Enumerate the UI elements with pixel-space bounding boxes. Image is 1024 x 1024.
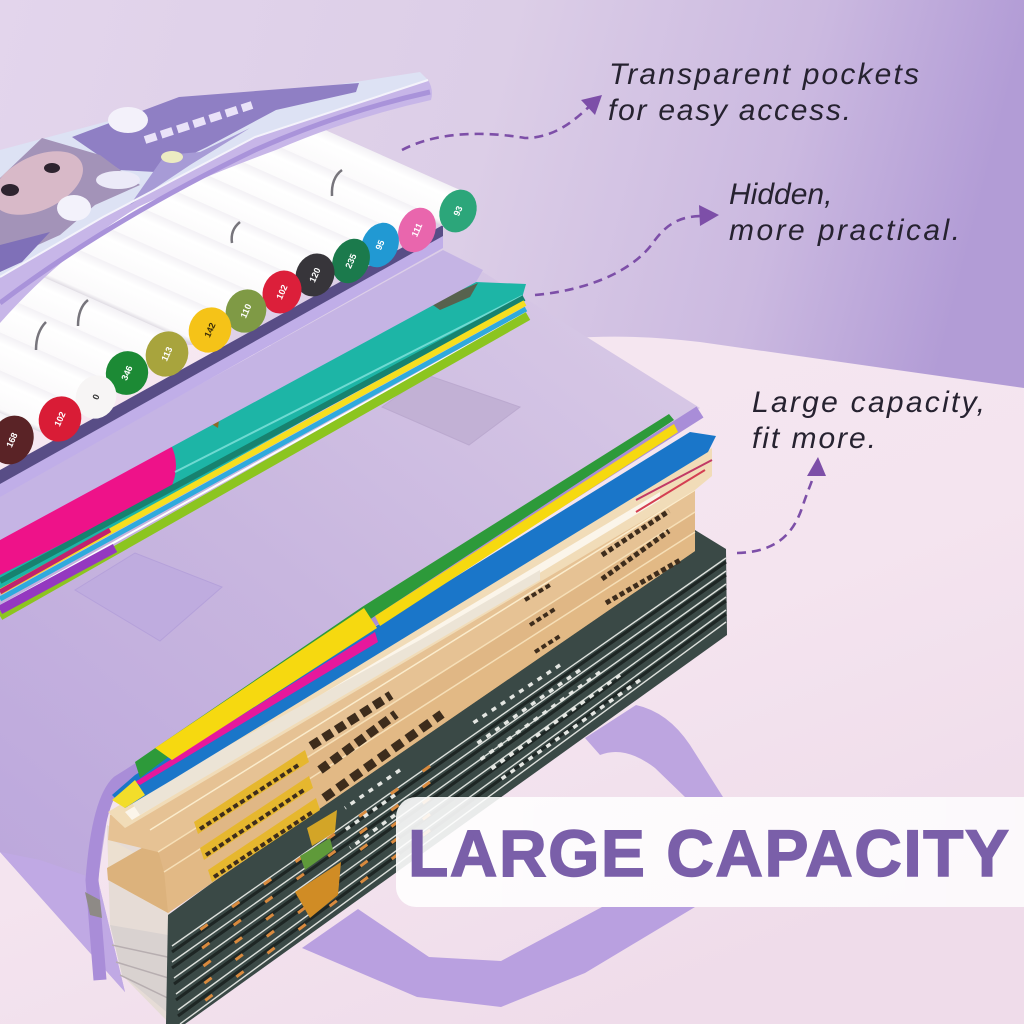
marker tray (0, 225, 443, 495)
face (0, 138, 93, 228)
spine titles (200, 511, 682, 877)
arrow (535, 205, 719, 295)
marker: blue: 95 (373, 238, 387, 252)
marker: green: 346 (119, 364, 135, 382)
marker: red 2 (0, 317, 89, 449)
marker: brown: 168 (4, 431, 20, 449)
marker: dark green: 235 (343, 252, 359, 270)
lower zipper (92, 412, 700, 980)
marker: dark green (159, 159, 377, 289)
flap zipper band (0, 80, 432, 323)
text: Hidden, (729, 178, 832, 211)
dark comics (166, 530, 727, 1024)
callout: hidden (535, 178, 960, 295)
text: fit more. (752, 422, 876, 455)
callout: pockets (402, 58, 929, 150)
strap: left loop (75, 553, 222, 641)
pocket zipper band (0, 250, 483, 540)
flap illustration panel (0, 72, 428, 277)
marker: pink (225, 128, 443, 258)
lower bat shape (130, 128, 250, 205)
tan book 2 (158, 510, 695, 872)
marker: white: 0 (90, 393, 102, 401)
marker: green (0, 272, 155, 402)
spine labels (194, 750, 320, 882)
text: for easy access. (608, 94, 851, 127)
marker: olive: 110 (238, 302, 254, 320)
strap: right loop (382, 375, 520, 445)
title: LARGE CAPACITY (408, 816, 1009, 890)
cream pages (108, 448, 712, 828)
marker: yellow (18, 228, 239, 360)
bat shape (72, 83, 359, 172)
title banner (396, 797, 1024, 907)
marker: olive yellow (0, 252, 196, 384)
arrow (737, 457, 826, 553)
marker: red 2: 102 (52, 410, 68, 428)
flap title (145, 105, 252, 140)
star (161, 151, 183, 163)
marker: olive yellow: 113 (159, 345, 175, 363)
zipper pull (85, 892, 102, 918)
upper pocket magazines (0, 282, 528, 616)
marker: red: 102 (274, 283, 290, 301)
text: Transparent pockets (609, 58, 919, 91)
marker: yellow: 142 (202, 321, 218, 339)
marker: black (123, 174, 341, 303)
markers (0, 110, 483, 471)
marker: white (0, 296, 123, 425)
page blocks (107, 825, 170, 1024)
bunny paw (57, 195, 91, 221)
callout: capacity (737, 386, 996, 553)
arrow (402, 95, 602, 150)
marker: blue (188, 143, 406, 273)
transparent flap (0, 72, 432, 323)
text: Large capacity, (752, 386, 985, 419)
book stack (107, 414, 727, 1024)
marker: pink: 111 (410, 222, 424, 238)
bag body (0, 272, 700, 992)
background wall (0, 0, 1024, 400)
marker: brown (0, 336, 41, 471)
marker: teal: 93 (451, 204, 465, 218)
text: more practical. (729, 214, 960, 247)
marker: red (90, 191, 308, 320)
character hair (0, 138, 140, 262)
marker: teal (266, 110, 483, 238)
tan book 3 (107, 531, 695, 913)
colored magazines (112, 432, 716, 808)
marker: black: 120 (307, 266, 323, 284)
marker: olive (54, 210, 273, 339)
tan book 1 (108, 488, 695, 852)
background table (0, 337, 1024, 1024)
bag handle (302, 705, 723, 1007)
marker barrel rings (36, 170, 342, 350)
